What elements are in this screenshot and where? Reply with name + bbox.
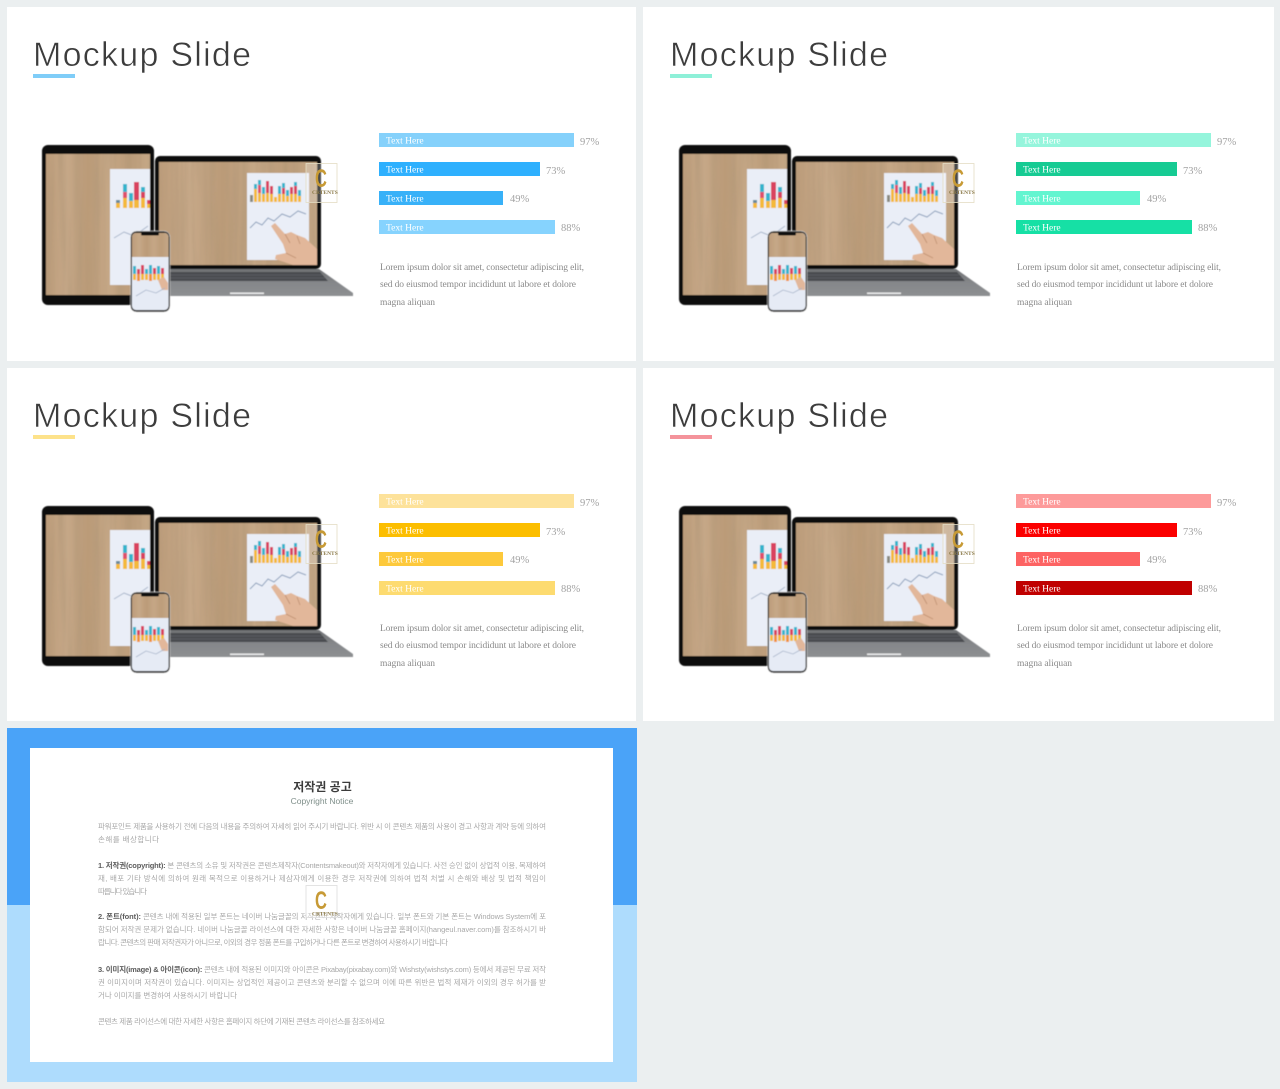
section 3: image and icon: [98, 964, 546, 1000]
section 2: font: 함되어 저작권 문제가 없습니다. 네이버 나눔글꼴 라이선스에 대한 자세한 사항은 네이버 나눔글꼴 홈페이지(hangeul.naver.com)를 참조하시기 바: [98, 924, 546, 934]
panel: yellow mockup slide: [7, 368, 636, 721]
section 1: copyright: 따릅니다 있습니다: [98, 887, 147, 896]
bar chart: Text Here: [386, 526, 424, 536]
body text: [1017, 624, 1221, 669]
bar chart: Text Here: [1023, 194, 1061, 204]
title underline: [33, 435, 75, 439]
watermark logo: [306, 524, 338, 564]
watermark logo: CRTENTS: [949, 551, 975, 557]
bar chart: 88%: [561, 584, 580, 595]
intro paragraph: 손해를 배상합니다: [98, 834, 159, 844]
bar chart: Text Here: [1023, 584, 1061, 594]
device mockup image: [679, 145, 990, 312]
bar chart: Text Here: [386, 136, 424, 146]
body text: [380, 263, 584, 308]
bar chart: Text Here: [1023, 498, 1061, 508]
watermark logo: CRTENTS: [312, 190, 338, 196]
section 3: image and icon: 거나 이미지를 변경하여 사용하시기 바랍니다: [98, 990, 237, 1000]
bar chart: 88%: [561, 223, 580, 234]
panel: copyright notice: [7, 728, 637, 1082]
watermark logo: [943, 524, 975, 564]
panel: blue mockup slide: [7, 7, 636, 361]
panel: red mockup slide: [643, 368, 1274, 721]
bar chart: 73%: [1183, 527, 1202, 538]
watermark logo: C: [315, 164, 327, 193]
section 1: copyright: [98, 860, 546, 896]
bar chart: 97%: [1217, 498, 1236, 509]
bar chart: Text Here: [1023, 136, 1061, 146]
heading: Mockup Slide: [33, 397, 251, 435]
body text: sed do eiusmod tempor incididunt ut labore et dolore: [380, 280, 576, 290]
section 2: font: 2. 폰트(font): 콘텐츠 내에 적용된 일부 폰트는 네이버 나눔글꼴의 저작권이 제작자에게 있습니다. 일부 폰트와 기본 폰트는 Windows System에 포: [98, 911, 546, 921]
body text: sed do eiusmod tempor incididunt ut labore et dolore: [1017, 280, 1213, 290]
body text: sed do eiusmod tempor incididunt ut labore et dolore: [1017, 641, 1213, 651]
bar chart: 73%: [1183, 166, 1202, 177]
watermark logo: CRTENTS: [949, 190, 975, 196]
section 2: font: [98, 911, 546, 947]
bar chart: [1016, 133, 1236, 234]
body text: magna aliquan: [380, 659, 435, 669]
body text: [380, 624, 584, 669]
bar chart: Text Here: [1023, 166, 1061, 176]
section 3: image and icon: 3. 이미지(image) & 아이콘(icon): 콘텐츠 내에 적용된 이미지와 아이콘은 Pixabay(pixabay.com)와 Wishsty(wishstys.com) 등에서 제공된 무료 저작: [98, 964, 546, 974]
body text: Lorem ipsum dolor sit amet, consectetur adipiscing elit,: [380, 263, 584, 273]
title underline: [33, 74, 75, 78]
heading: Mockup Slide: [670, 36, 888, 74]
body text: magna aliquan: [1017, 659, 1072, 669]
watermark logo: C: [952, 525, 964, 554]
bar chart: Text Here: [386, 584, 424, 594]
section 1: copyright: 1. 저작권(copyright): 본 콘텐츠의 소유 및 저작권은 콘텐츠제작자(Contentsmakeout)와 저작자에게 있습니다. 사전 승인 없이 상업적 이용, 복제하여: [98, 860, 546, 870]
bar chart: Text Here: [386, 224, 424, 234]
watermark logo: [306, 886, 338, 918]
bar chart: 88%: [1198, 584, 1218, 595]
bar chart: 97%: [580, 137, 600, 148]
title underline: [670, 435, 712, 439]
bar chart: Text Here: [386, 194, 424, 204]
bar chart: [1016, 494, 1236, 595]
heading: Mockup Slide: [670, 397, 888, 435]
bar chart: 73%: [546, 527, 566, 538]
watermark logo: CRTENTS: [312, 551, 338, 557]
watermark logo: C: [315, 886, 327, 915]
bar chart: [379, 133, 600, 234]
closing note: 콘텐츠 제품 라이선스에 대한 자세한 사항은 홈페이지 하단에 기재된 콘텐츠 라이선스를 참조하세요: [98, 1016, 385, 1026]
bar chart: 49%: [510, 555, 530, 566]
bar chart: Text Here: [386, 498, 424, 508]
bar chart: [379, 494, 600, 595]
bar chart: 73%: [546, 166, 566, 177]
body text: Lorem ipsum dolor sit amet, consectetur adipiscing elit,: [1017, 263, 1221, 273]
watermark logo: [306, 164, 338, 202]
device mockup image: [679, 506, 990, 673]
body text: Lorem ipsum dolor sit amet, consectetur adipiscing elit,: [1017, 624, 1221, 634]
body text: magna aliquan: [380, 298, 435, 308]
bar chart: 49%: [510, 194, 530, 205]
copyright title: 저작권 공고: [293, 779, 352, 794]
copyright subtitle: Copyright Notice: [291, 796, 354, 806]
heading: Mockup Slide: [33, 36, 251, 74]
body text: sed do eiusmod tempor incididunt ut labore et dolore: [380, 641, 576, 651]
body text: [1017, 263, 1221, 308]
panel: green mockup slide: [643, 7, 1274, 361]
bar chart: Text Here: [1023, 556, 1061, 566]
watermark logo: CRTENTS: [312, 912, 338, 918]
bar chart: Text Here: [386, 166, 424, 176]
intro paragraph: 파워포인트 제품을 사용하기 전에 다음의 내용을 주의하여 자세히 읽어 주시기 바랍니다. 위반 시 이 콘텐츠 제품의 사용이 경고 사항과 계약 등에 의하여: [98, 821, 546, 831]
bar chart: 88%: [1198, 223, 1218, 234]
watermark logo: C: [315, 525, 327, 554]
section 1: copyright: 재, 배포 기타 방식에 의하여 원래 목적으로 이용하거나 제삼자에게 이용한 경우 저작권에 의하여 법적 처벌 시 손해와 배상 및 법적 책임이: [98, 873, 546, 883]
bar chart: 49%: [1147, 555, 1166, 566]
section 2: font: 랍니다. 콘텐츠의 판매 저작권자가 아니므로, 이외의 경우 정품 폰트를 구입하거나 다른 폰트로 변경하여 사용하시기 바랍니다: [98, 937, 448, 947]
section 3: image and icon: 권 이미지이며 저작권이 있습니다. 이미지는 상업적인 제공이고 콘텐츠와 분리할 수 없으며 이에 따른 위반은 법적 제재가 이외의 경우 허가를 받: [98, 977, 546, 987]
bar chart: 97%: [1217, 137, 1236, 148]
watermark logo: [943, 164, 975, 202]
bar chart: Text Here: [1023, 526, 1061, 536]
device mockup image: [42, 506, 353, 673]
body text: Lorem ipsum dolor sit amet, consectetur adipiscing elit,: [380, 624, 584, 634]
watermark logo: C: [952, 164, 964, 193]
bar chart: Text Here: [1023, 224, 1061, 234]
title underline: [670, 74, 712, 78]
intro paragraph: [98, 821, 546, 844]
bar chart: Text Here: [386, 556, 424, 566]
body text: magna aliquan: [1017, 298, 1072, 308]
bar chart: 49%: [1147, 194, 1166, 205]
bar chart: 97%: [580, 498, 600, 509]
device mockup image: [42, 145, 353, 312]
